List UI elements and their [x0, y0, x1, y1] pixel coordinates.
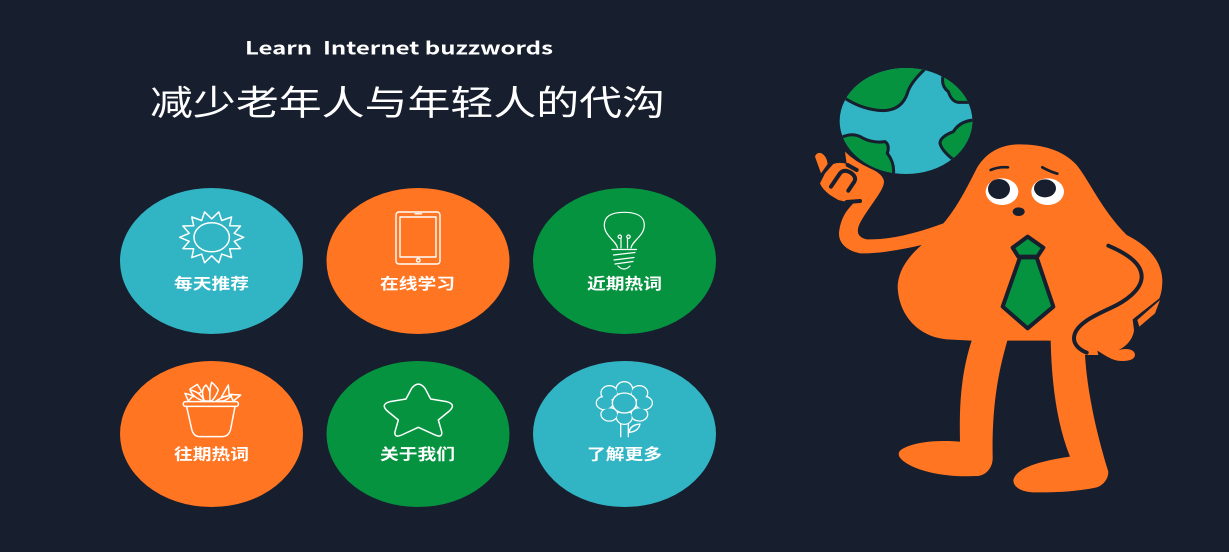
right arm strip — [1137, 300, 1160, 327]
character body — [839, 144, 1162, 492]
panel: 近期热词 — [533, 188, 716, 334]
subtitle: Learn Internet buzzwords: Learn Internet buzzwords — [245, 34, 553, 60]
character: orange mascot spinning a globe — [815, 57, 1162, 492]
icon: flower — [596, 382, 652, 437]
title: 减少老年人与年轻人的代沟 — [150, 85, 665, 123]
panel: 往期热词 — [120, 361, 303, 507]
label: 在线学习: 在线学习 — [380, 274, 455, 293]
panel: 每天推荐 — [120, 188, 303, 334]
panel: 在线学习 — [326, 188, 510, 334]
label: 近期热词: 近期热词 — [587, 275, 662, 293]
pointing hand — [815, 152, 884, 205]
label: 了解更多: 了解更多 — [587, 444, 662, 464]
label: 每天推荐: 每天推荐 — [174, 274, 249, 293]
icon: tablet — [396, 212, 440, 264]
panel: 了解更多 — [533, 361, 716, 507]
right arm outline — [1074, 246, 1142, 353]
label: 关于我们: 关于我们 — [380, 444, 455, 464]
icon: light bulb — [604, 212, 644, 269]
icon: potted plant — [183, 382, 241, 437]
panel: 关于我们 — [326, 361, 510, 507]
necktie — [1003, 237, 1053, 328]
icon: sun — [180, 212, 244, 263]
label: 往期热词: 往期热词 — [174, 444, 249, 464]
icon: star — [384, 384, 452, 436]
globe — [840, 68, 972, 174]
face — [986, 167, 1064, 216]
